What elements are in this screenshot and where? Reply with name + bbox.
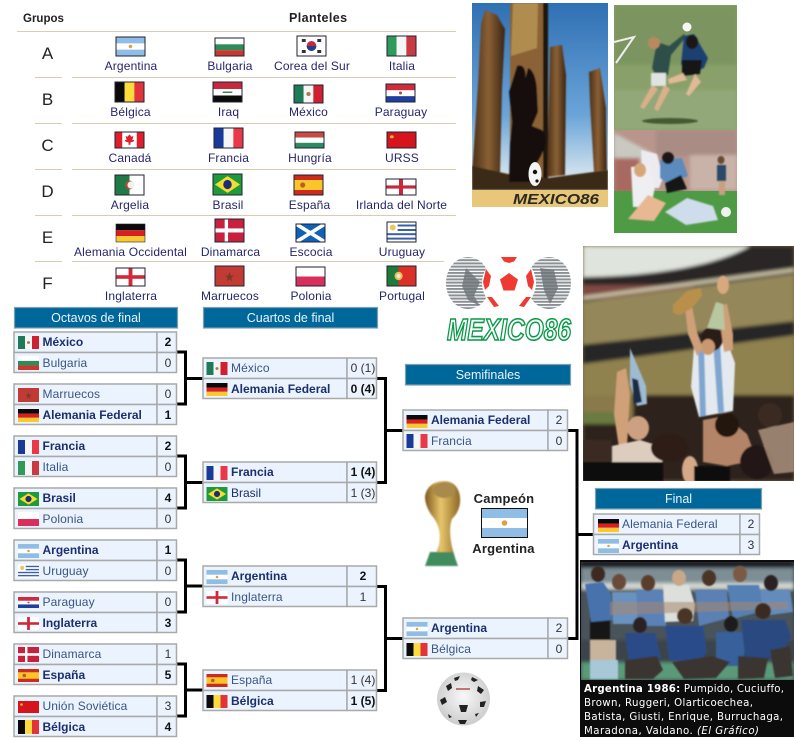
cuartos match 1: Alemania Federal bbox=[231, 382, 330, 396]
cuartos match 2: Brasil bbox=[231, 486, 261, 500]
photo: hand of God bbox=[614, 5, 737, 130]
cuartos match 4: Bélgica bbox=[231, 694, 274, 708]
icon: Azteca match ball bbox=[437, 672, 490, 726]
group A: A bbox=[42, 44, 54, 63]
champion label: Campeón bbox=[474, 491, 534, 506]
octavos match 6: Inglaterra bbox=[42, 616, 98, 630]
semifinal 2: 0 bbox=[556, 642, 563, 656]
group C: Canadá bbox=[109, 151, 152, 165]
octavos match 6: Paraguay bbox=[42, 595, 95, 609]
cuartos match 3 bbox=[203, 566, 376, 606]
group D: Brasil bbox=[213, 198, 243, 212]
header: cuartos bbox=[204, 308, 378, 328]
octavos match 2 bbox=[14, 384, 176, 424]
octavos match 4: Polonia bbox=[42, 512, 83, 526]
caption: Maradona, Valdano. (El Gráfico) bbox=[584, 725, 759, 737]
group E: E bbox=[42, 228, 53, 247]
semifinal 2 bbox=[403, 618, 568, 658]
group F: Marruecos bbox=[201, 289, 259, 303]
group C: C bbox=[41, 136, 54, 155]
octavos match 2: 0 bbox=[165, 387, 172, 401]
group E: Alemania Occidental bbox=[74, 245, 187, 259]
group B: Bélgica bbox=[110, 105, 151, 119]
group D: Irlanda del Norte bbox=[356, 198, 447, 212]
group A: Italia bbox=[389, 59, 415, 73]
octavos match 2: Alemania Federal bbox=[42, 408, 142, 422]
group A: Argentina bbox=[105, 59, 158, 73]
cuartos match 2: Francia bbox=[231, 465, 274, 479]
semifinal 2: 2 bbox=[556, 621, 563, 635]
cuartos match 3: 1 bbox=[360, 590, 367, 604]
octavos match 2: 1 bbox=[165, 408, 172, 422]
header: final: Final bbox=[665, 492, 692, 506]
table headers: Grupos bbox=[23, 13, 64, 25]
group D: España bbox=[289, 198, 330, 212]
header: semifinales: Semifinales bbox=[456, 368, 520, 382]
final match: 2 bbox=[748, 517, 755, 531]
semifinal 1: Alemania Federal bbox=[431, 413, 530, 427]
group F: Inglaterra bbox=[105, 289, 157, 303]
semifinal 2: Bélgica bbox=[431, 642, 471, 656]
group D bbox=[41, 174, 447, 212]
octavos match 8: Unión Soviética bbox=[42, 699, 128, 713]
octavos match 7 bbox=[14, 644, 176, 684]
cuartos match 1: 0 (1) bbox=[351, 361, 375, 375]
group table bbox=[17, 11, 456, 303]
group D: Argelia bbox=[111, 198, 149, 212]
group B: Iraq bbox=[218, 105, 239, 119]
octavos match 6: 3 bbox=[165, 616, 172, 630]
group B: México bbox=[289, 105, 328, 119]
group F: Polonia bbox=[290, 289, 332, 303]
final match bbox=[594, 514, 760, 554]
cuartos match 2: 1 (4) bbox=[351, 465, 375, 479]
bracket connectors bbox=[176, 352, 593, 716]
group E: Escocia bbox=[289, 245, 333, 259]
octavos match 4 bbox=[14, 488, 176, 528]
champion label: Argentina bbox=[472, 541, 535, 556]
header: octavos bbox=[14, 308, 178, 328]
final match: 3 bbox=[748, 538, 755, 552]
cuartos match 3: Inglaterra bbox=[231, 590, 283, 604]
header: semifinales bbox=[406, 364, 570, 385]
octavos match 1: México bbox=[42, 335, 83, 349]
cuartos match 4: 1 (4) bbox=[351, 673, 375, 687]
header: cuartos: Cuartos de final bbox=[247, 311, 334, 325]
team photo with caption bbox=[580, 560, 794, 737]
octavos match 3: Francia bbox=[42, 439, 86, 453]
group B bbox=[42, 82, 427, 119]
cuartos match 1 bbox=[203, 358, 376, 398]
octavos match 1 bbox=[14, 332, 176, 372]
octavos match 6: 0 bbox=[165, 595, 172, 609]
octavos match 3: Italia bbox=[42, 460, 69, 474]
octavos match 5: Uruguay bbox=[42, 564, 89, 578]
octavos match 7: España bbox=[42, 668, 86, 682]
cuartos match 4: 1 (5) bbox=[351, 694, 375, 708]
octavos match 4: 4 bbox=[165, 491, 172, 505]
cuartos match 2: 1 (3) bbox=[351, 486, 375, 500]
icon: World Cup trophy bbox=[425, 481, 460, 566]
team photo bbox=[581, 562, 794, 680]
octavos match 8: 3 bbox=[165, 699, 172, 713]
octavos match 3 bbox=[14, 436, 176, 476]
cuartos match 4: España bbox=[231, 673, 273, 687]
octavos match 1: 2 bbox=[165, 335, 172, 349]
final match: Alemania Federal bbox=[622, 517, 718, 531]
group F bbox=[42, 266, 425, 303]
group B: Paraguay bbox=[375, 105, 427, 119]
group E bbox=[42, 219, 425, 259]
group B: B bbox=[42, 90, 53, 109]
group A: Corea del Sur bbox=[274, 59, 350, 73]
cuartos match 3: Argentina bbox=[231, 569, 287, 583]
octavos match 1: Bulgaria bbox=[42, 356, 88, 370]
semifinal 1: 0 bbox=[556, 434, 563, 448]
table headers: Planteles bbox=[289, 11, 348, 25]
group C: Hungría bbox=[288, 151, 332, 165]
group E: Dinamarca bbox=[201, 245, 260, 259]
header: octavos: Octavos de final bbox=[51, 311, 141, 325]
octavos match 4: Brasil bbox=[42, 491, 76, 505]
group C: URSS bbox=[385, 151, 419, 165]
cuartos match 1: México bbox=[231, 361, 270, 375]
octavos match 4: 0 bbox=[165, 512, 172, 526]
caption: Argentina 1986: Pumpido, Cuciuffo, bbox=[584, 684, 784, 695]
logo: Mexico 86 emblem bbox=[446, 256, 572, 347]
octavos match 5: 1 bbox=[165, 543, 172, 557]
octavos match 8 bbox=[14, 696, 176, 736]
group E: Uruguay bbox=[379, 245, 425, 259]
octavos match 3: 0 bbox=[165, 460, 172, 474]
octavos match 5 bbox=[14, 540, 176, 580]
photo: Maradona dribbling England bbox=[614, 130, 737, 233]
semifinal 1 bbox=[403, 410, 568, 450]
octavos match 2: Marruecos bbox=[42, 387, 100, 401]
table headers bbox=[23, 11, 348, 25]
final match: Argentina bbox=[622, 538, 678, 552]
octavos match 5: Argentina bbox=[42, 543, 99, 557]
caption bbox=[584, 684, 784, 737]
caption: Batista, Giusti, Enrique, Burruchaga, bbox=[584, 712, 783, 723]
octavos match 6 bbox=[14, 592, 176, 632]
octavos match 7: 1 bbox=[165, 647, 172, 661]
cuartos match 3: 2 bbox=[360, 569, 367, 583]
group F: Portugal bbox=[379, 289, 425, 303]
caption: Brown, Ruggeri, Olarticoechea, bbox=[584, 698, 753, 709]
photo: Maradona with trophy bbox=[583, 246, 794, 484]
semifinal 2: Argentina bbox=[431, 621, 487, 635]
octavos match 8: 4 bbox=[165, 720, 172, 734]
header: final bbox=[596, 488, 762, 509]
cuartos match 1: 0 (4) bbox=[351, 382, 375, 396]
octavos match 7: Dinamarca bbox=[42, 647, 102, 661]
group C bbox=[41, 128, 419, 165]
cuartos match 2 bbox=[203, 462, 376, 502]
group D: D bbox=[41, 182, 54, 201]
poster: Mexico 86 bbox=[472, 3, 608, 208]
logo: Mexico 86 emblem: MEXICO86 bbox=[447, 312, 572, 347]
group A bbox=[42, 36, 416, 73]
group C: Francia bbox=[208, 151, 249, 165]
champion label bbox=[472, 491, 535, 556]
group F: F bbox=[42, 274, 53, 293]
octavos match 7: 5 bbox=[165, 668, 172, 682]
semifinal 1: Francia bbox=[431, 434, 472, 448]
cuartos match 4 bbox=[203, 670, 376, 710]
octavos match 3: 2 bbox=[165, 439, 172, 453]
poster: Mexico 86: MEXICO86 bbox=[513, 191, 600, 208]
semifinal 1: 2 bbox=[556, 413, 563, 427]
octavos match 8: Bélgica bbox=[42, 720, 86, 734]
octavos match 5: 0 bbox=[165, 564, 172, 578]
octavos match 1: 0 bbox=[165, 356, 172, 370]
group A: Bulgaria bbox=[207, 59, 253, 73]
